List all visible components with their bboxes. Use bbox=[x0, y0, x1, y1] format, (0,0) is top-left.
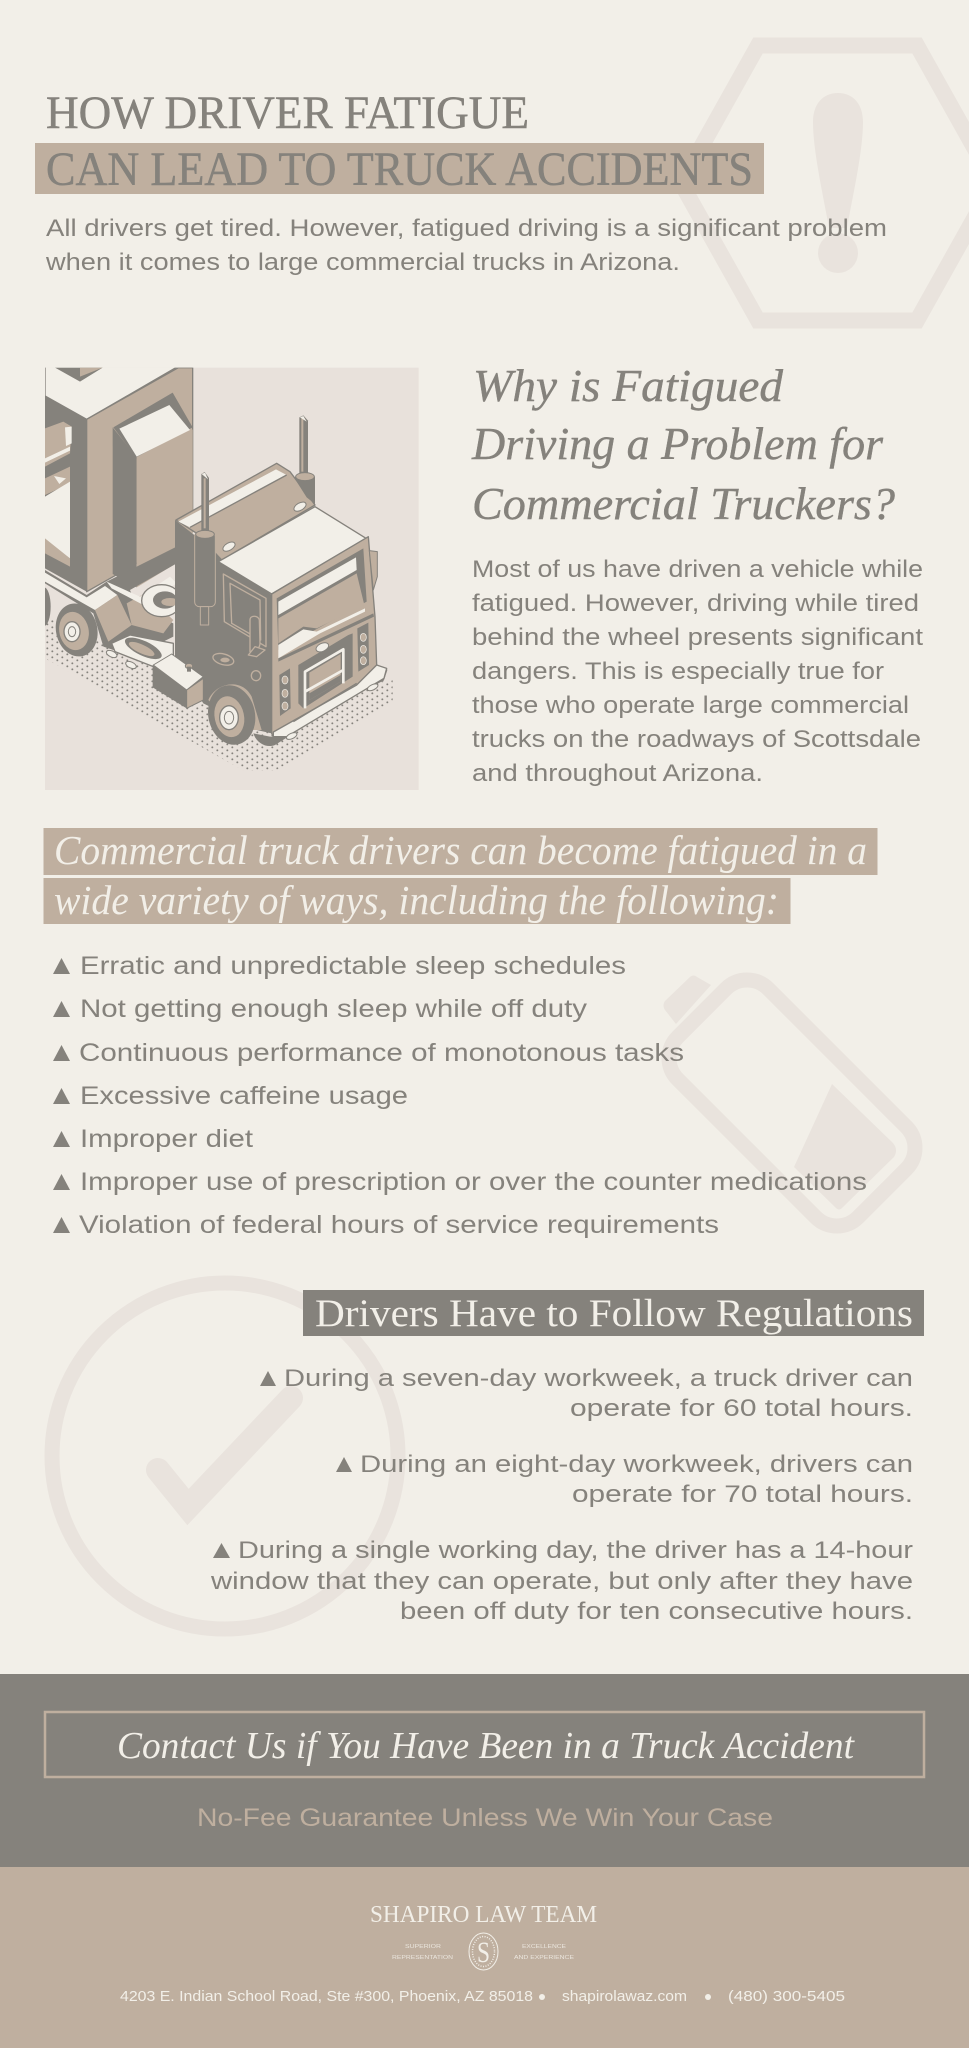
firm name: SHAPIRO LAW TEAM bbox=[370, 1902, 597, 1928]
intro text bbox=[45, 215, 887, 276]
list: causes of fatigue: Not getting enough sleep while off duty bbox=[80, 995, 588, 1023]
cab side bbox=[175, 520, 272, 733]
fuel tank bbox=[153, 654, 203, 708]
heading: why fatigued driving bbox=[471, 360, 895, 529]
bumper bbox=[273, 665, 387, 737]
panel: truck illustration bbox=[37, 363, 419, 790]
icon: check mark circle bbox=[52, 1283, 398, 1629]
list: causes of fatigue: Improper diet bbox=[80, 1125, 253, 1153]
list: causes of fatigue: Continuous performance of monotonous tasks bbox=[79, 1039, 684, 1067]
list: regulations bbox=[210, 1365, 913, 1625]
banner: ways to become fatigued: wide variety of ways, including the following: bbox=[54, 877, 779, 923]
body text: why fatigued driving: fatigued. However, driving while tired bbox=[472, 590, 919, 617]
firm logo: REPRESENTATION bbox=[392, 1955, 454, 1961]
title: HOW DRIVER FATIGUE bbox=[46, 87, 529, 139]
list: regulations: operate for 70 total hours. bbox=[572, 1481, 913, 1508]
icon: warning hexagon bbox=[681, 46, 969, 320]
cab door and mirror bbox=[212, 574, 266, 681]
list: regulations: window that they can operate, but only after they have bbox=[210, 1568, 913, 1595]
contact box: Contact Us if You Have Been in a Truck Accident bbox=[117, 1725, 855, 1767]
banner: ways to become fatigued bbox=[44, 827, 878, 924]
list: causes of fatigue: Violation of federal hours of service requirements bbox=[79, 1211, 719, 1239]
list: regulations: During a single working day, the driver has a 14-hour bbox=[238, 1537, 913, 1564]
panel: footer bbox=[0, 1867, 969, 2048]
halftone ground shadow bbox=[45, 617, 393, 771]
title bbox=[35, 87, 764, 196]
contact details: 4203 E. Indian School Road, Ste #300, Phoenix, AZ 85018 bbox=[120, 1989, 533, 2005]
right exhaust stack bbox=[295, 415, 315, 504]
list: regulations: During an eight-day workweek, drivers can bbox=[360, 1451, 913, 1478]
list: causes of fatigue: Excessive caffeine usage bbox=[80, 1082, 408, 1110]
body text: why fatigued driving: dangers. This is especially true for bbox=[472, 658, 884, 685]
intro text: All drivers get tired. However, fatigued driving is a significant problem bbox=[46, 215, 887, 242]
left exhaust stack bbox=[195, 472, 215, 625]
list: causes of fatigue: Improper use of prescription or over the counter medications bbox=[80, 1168, 867, 1196]
heading: regulations: Drivers Have to Follow Regulations bbox=[315, 1292, 913, 1335]
cab front bbox=[253, 537, 387, 746]
grille bbox=[298, 633, 353, 708]
firm logo: SUPERIOR bbox=[405, 1944, 442, 1950]
firm logo: EXCELLENCE bbox=[522, 1944, 567, 1950]
intro text: when it comes to large commercial trucks in Arizona. bbox=[45, 249, 680, 276]
title: CAN LEAD TO TRUCK ACCIDENTS bbox=[46, 143, 753, 196]
contact details: (480) 300-5405 bbox=[728, 1989, 845, 2005]
heading: why fatigued driving: Why is Fatigued bbox=[473, 360, 784, 411]
headlights bbox=[279, 668, 291, 716]
list: regulations: During a seven-day workweek, a truck driver can bbox=[284, 1365, 913, 1392]
body text: why fatigued driving: and throughout Arizona. bbox=[472, 760, 763, 787]
firm logo: S bbox=[477, 1936, 490, 1969]
body text: why fatigued driving: Most of us have driven a vehicle while bbox=[472, 556, 923, 583]
list: regulations: been off duty for ten consecutive hours. bbox=[400, 1598, 913, 1625]
list: causes of fatigue: Erratic and unpredictable sleep schedules bbox=[80, 952, 626, 980]
front wheel bbox=[208, 684, 262, 745]
roof fairing bbox=[176, 463, 315, 560]
banner: ways to become fatigued: Commercial truck drivers can become fatigued in a bbox=[54, 827, 867, 873]
windscreen bbox=[277, 548, 367, 650]
contact details: shapirolawaz.com bbox=[562, 1989, 687, 2005]
icon: low battery bbox=[657, 968, 927, 1238]
chassis and fifth wheel bbox=[45, 547, 182, 670]
heading: why fatigued driving: Commercial Truckers? bbox=[472, 478, 895, 529]
guarantee text: No-Fee Guarantee Unless We Win Your Case bbox=[197, 1804, 773, 1832]
body text: why fatigued driving: behind the wheel presents significant bbox=[472, 624, 923, 651]
trailer body bbox=[45, 363, 193, 592]
contact box bbox=[45, 1712, 924, 1777]
body text: why fatigued driving: those who operate large commercial bbox=[472, 692, 909, 719]
list: regulations: operate for 60 total hours. bbox=[570, 1395, 913, 1422]
body text: why fatigued driving: trucks on the roadways of Scottsdale bbox=[472, 726, 921, 753]
firm logo: AND EXPERIENCE bbox=[514, 1955, 575, 1961]
rear wheels bbox=[45, 588, 98, 656]
heading: why fatigued driving: Driving a Problem for bbox=[471, 418, 884, 469]
panel: contact call to action bbox=[0, 1674, 969, 1867]
cab roof bbox=[218, 507, 366, 594]
contact details bbox=[120, 1989, 845, 2005]
list: causes of fatigue bbox=[53, 952, 867, 1239]
firm logo bbox=[392, 1933, 575, 1970]
body text: why fatigued driving bbox=[472, 556, 923, 787]
